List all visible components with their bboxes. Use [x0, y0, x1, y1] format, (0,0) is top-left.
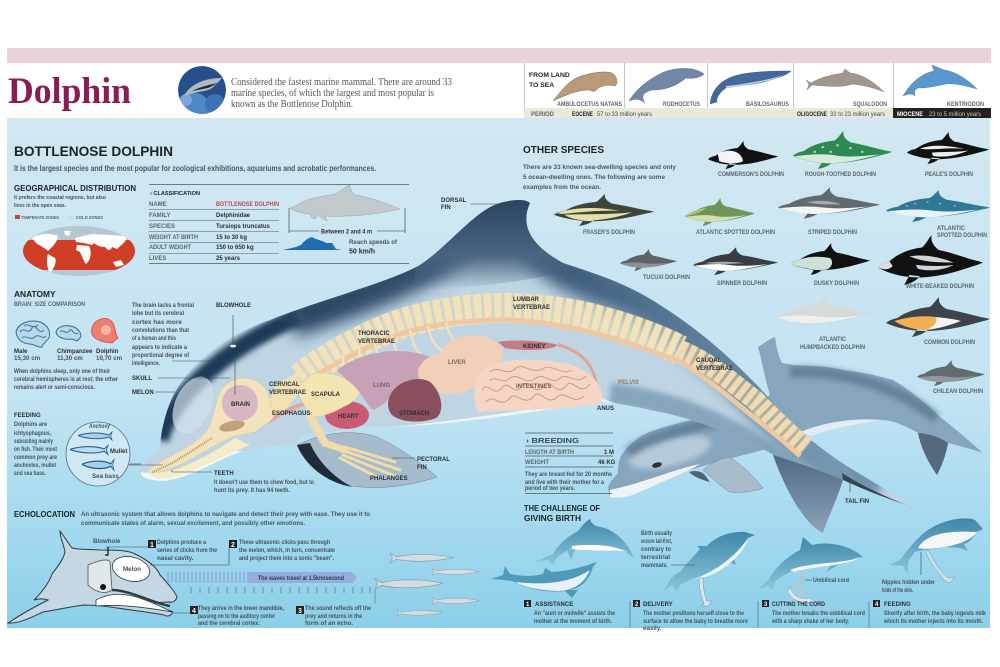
species labels: STRIPED DOLPHIN: [808, 230, 857, 236]
arrow: ultrasonic waves: [168, 572, 357, 584]
anatomy labels: HEART: [338, 414, 359, 420]
anatomy labels: PECTORAL: [417, 457, 450, 463]
timeline species names: BASILOSAURUS: [746, 102, 789, 108]
tucuxi dolphin: [620, 249, 677, 271]
second dolphin belly and jaw: [610, 464, 700, 498]
step 1 assistance: An "aunt or midwife" assists the: [534, 610, 615, 617]
breeding rows: LENGTH AT BIRTH: [525, 450, 574, 456]
feeding text: anchovies, mullet: [14, 462, 56, 469]
second dolphin back flipper: [689, 471, 710, 482]
timeline periods: 33 to 23 million years: [830, 112, 885, 118]
birth note: terrestrial: [641, 554, 670, 561]
sleep text: When dolphins sleep, only one of their: [14, 368, 110, 375]
panel: from land to sea timeline: [524, 63, 991, 118]
commerson's dolphin: [708, 141, 778, 169]
main dolphin: [130, 190, 930, 540]
cervical vertebrae: [270, 372, 302, 415]
timeline periods: [531, 112, 981, 118]
striped dolphin: [778, 187, 880, 219]
blowhole mark: [230, 344, 236, 348]
classification rows: ADULT WEIGHT: [149, 245, 191, 251]
panel: breeding: [525, 433, 616, 494]
anatomy labels: PELVIS: [618, 380, 639, 386]
echolocation heading: ECHOLOCATION: [14, 510, 75, 519]
step 4 feeding: which its mother injects into its mouth.: [883, 618, 983, 625]
teeth text: hunt its prey. It has 94 teeth.: [214, 487, 290, 494]
classification rows: Tursiops truncatus: [216, 224, 271, 230]
speed text: Reach speeds of: [349, 239, 398, 246]
step 3 echo: The sound reflects off the: [305, 605, 371, 612]
timeline species names: RODHOCETUS: [663, 102, 700, 108]
step 4 feeding: FEEDING: [884, 602, 911, 608]
species labels: WHITE-BEAKED DOLPHIN: [906, 284, 974, 290]
species labels: ROUGH-TOOTHED DOLPHIN: [805, 172, 876, 178]
classification rows: NAME: [149, 202, 167, 208]
anatomy labels: INTESTINES: [516, 384, 551, 390]
spine and vertebrae: [300, 308, 806, 456]
nipple callout: folds of the skin.: [882, 587, 913, 594]
brain text: proportional degree of: [132, 352, 190, 359]
fraser's dolphin: [554, 194, 654, 226]
step 3 cutting the cord: 3: [764, 602, 768, 608]
species labels: SPOTTED DOLPHIN: [937, 233, 987, 239]
timeline periods: 23 to 5 million years: [929, 112, 981, 118]
brain sizes: Chimpanzee: [57, 349, 93, 355]
brain sizes: Dolphin: [96, 349, 119, 355]
intro text: Considered the fastest marine mammal. There are around 33: [231, 77, 452, 88]
pectoral fin: [297, 433, 437, 488]
timeline periods: OLIGOCENE: [797, 112, 827, 118]
panel: the challenge of giving birth: [491, 504, 986, 632]
step 4 feeding: 4: [875, 602, 879, 608]
anatomy labels: FIN: [417, 465, 427, 471]
speed text: [349, 239, 398, 256]
feeding text: and sea bass.: [14, 470, 46, 477]
feeding heading: FEEDING: [14, 413, 41, 419]
anatomy labels: VERTEBRAE: [358, 339, 395, 345]
dusky dolphin: [791, 243, 870, 275]
anatomy labels: MELON: [132, 390, 154, 396]
timeline heading: FROM LAND: [529, 72, 570, 79]
teeth text: It doesn't use them to chew food, but to: [214, 479, 314, 486]
breeding text: They are breast-fed for 20 months: [525, 471, 612, 478]
teeth text: [214, 479, 314, 494]
breeding rows: 1 M: [604, 450, 614, 456]
feeding text: common prey are: [14, 454, 57, 461]
classification rows: 15 to 30 kg: [216, 235, 247, 241]
anatomy labels: [128, 198, 869, 505]
species labels: SPINNER DOLPHIN: [717, 281, 767, 287]
feeding text: subsisting mainly: [14, 438, 53, 445]
other species text: 5 ocean-dwelling ones. The following are some: [523, 174, 665, 181]
echolocation text: communicate states of alarm, sexual excitement, and possibly other emotions.: [81, 520, 305, 527]
icon: dolphin brain: [92, 318, 118, 343]
panel: other species: [523, 131, 990, 395]
nipple callout: Nipples hidden under: [882, 579, 935, 586]
flipper bones: [310, 416, 400, 476]
classification rows: BOTTLENOSE DOLPHIN: [216, 202, 279, 208]
anatomy labels: TEETH: [214, 471, 234, 477]
rough-toothed dolphin: [793, 131, 892, 169]
brain sizes: 11,30 cm: [57, 355, 83, 362]
birth note: mammals.: [641, 562, 668, 569]
ribs: [343, 322, 458, 385]
anatomy labels: DORSAL: [441, 198, 467, 204]
second dolphin light flank: [626, 428, 714, 476]
breeding text: [525, 471, 612, 492]
brain text: [132, 302, 194, 367]
map legend: COLD ZONES: [76, 215, 103, 220]
birth dolphin 3: [756, 537, 863, 590]
anatomy labels: VERTEBRAE: [513, 305, 550, 311]
intro text: [231, 77, 452, 110]
liver: [418, 335, 503, 394]
brain sizes: Male: [14, 349, 28, 355]
brain text: The brain lacks a frontal: [132, 302, 194, 309]
second dolphin back shade: [628, 372, 936, 452]
timeline periods: 57 to 33 million years: [597, 112, 652, 118]
panel: classification table: [149, 184, 409, 264]
species labels: HUMPBACKED DOLPHIN: [800, 345, 865, 351]
anatomy labels: LUNG: [373, 383, 390, 389]
breeding text: period of two years.: [525, 485, 575, 492]
step 4 feeding: [869, 600, 986, 628]
brain text: of a human and this: [132, 335, 176, 342]
anatomy labels: TAIL FIN: [845, 499, 869, 505]
pectoral dark edge: [297, 443, 352, 487]
second dolphin pectoral fin: [703, 457, 763, 492]
intro text: marine species, of which the largest and most popular is: [231, 88, 434, 99]
step 4 auditory: passing on to the auditory center: [198, 613, 275, 620]
brain text: appears to indicate a: [132, 344, 187, 351]
echolocation text: An ultrasonic system that allows dolphins to navigate and detect their prey with ease. They use it to: [81, 511, 370, 518]
breeding rows: [525, 450, 616, 466]
species labels: ATLANTIC SPOTTED DOLPHIN: [696, 230, 775, 236]
timeline periods: MIOCENE: [897, 112, 923, 118]
timeline heading: [529, 72, 570, 89]
step 4 auditory: They arrive in the lower mandible,: [198, 605, 284, 612]
step 3 cutting the cord: The mother breaks the umbilical cord: [772, 610, 865, 617]
birth heading: GIVING BIRTH: [524, 514, 581, 523]
timeline species names: KENTRIODON: [947, 102, 984, 108]
geographical text: [14, 195, 107, 209]
subtitle: It is the largest species and the most popular for zoological exhibitions, aquariums and acrobatic performances.: [14, 164, 376, 173]
lung: [337, 351, 430, 410]
icon: squalodon: [806, 69, 884, 92]
step 4 auditory: and the cerebral cortex.: [198, 620, 260, 627]
feeding text: on fish. Their most: [14, 446, 57, 453]
peale's dolphin: [907, 132, 989, 164]
timeline periods: PERIOD: [531, 112, 555, 118]
callout: prey fish circle: Anchovy: [88, 423, 110, 430]
panel: second dolphin background: [608, 337, 983, 498]
baby dolphin feeding: [926, 550, 955, 583]
panel: geographical distribution: [14, 183, 140, 280]
timeline heading: TO SEA: [529, 82, 554, 89]
species labels: PEALE'S DOLPHIN: [925, 172, 973, 178]
anatomy labels: LUMBAR: [513, 297, 540, 303]
brain sizes: 10,70 cm: [96, 355, 123, 362]
anatomy labels: ANUS: [597, 406, 614, 412]
anatomy labels: ESOPHAGUS: [272, 411, 310, 417]
species labels: ATLANTIC: [937, 226, 966, 232]
icon: human brain: [16, 321, 50, 347]
icon: rodhocetus: [629, 68, 704, 103]
anatomy labels: VERTEBRAE: [696, 366, 733, 372]
intro text: known as the Bottlenose Dolphin.: [231, 99, 353, 110]
geographical heading: GEOGRAPHICAL DISTRIBUTION: [14, 183, 136, 193]
anatomy heading: ANATOMY: [14, 289, 56, 299]
geographical text: It prefers the coastal regions, but also: [14, 195, 107, 201]
step 1 assistance: mother at the moment of birth.: [534, 618, 612, 625]
anatomy labels: BLOWHOLE: [216, 303, 251, 309]
echolocation text: [81, 511, 370, 527]
icon: ambulocetus: [553, 72, 617, 101]
step 2 delivery: [630, 600, 748, 632]
breeding rows: 46 KG: [598, 460, 616, 466]
anatomy labels: LIVER: [448, 360, 466, 366]
anatomy labels: BRAIN: [231, 402, 250, 408]
step 4 auditory: [190, 605, 284, 627]
spinner dolphin: [693, 247, 778, 275]
step 1 assistance: ASSISTANCE: [535, 602, 573, 608]
step 2 delivery: 2: [635, 602, 639, 608]
step 1 clicks: Dolphins produce a: [157, 539, 206, 546]
other species heading: OTHER SPECIES: [523, 144, 604, 156]
step 3 cutting the cord: CUTTING THE CORD: [772, 602, 826, 608]
chilean dolphin: [917, 360, 985, 386]
panel: echolocation: [8, 510, 479, 627]
geographical text: lives in the open seas.: [14, 203, 66, 209]
echolocation dolphin diagram: Blowhole: [93, 538, 121, 545]
esophagus: [268, 398, 325, 422]
heart: [325, 401, 369, 429]
birth note: [641, 530, 695, 569]
icon: size dolphin: [290, 185, 400, 221]
second dolphin white belly patch: [800, 419, 880, 436]
second dolphin fluke: [918, 433, 948, 475]
step 2 beam: [229, 539, 335, 562]
breeding rows: WEIGHT: [525, 460, 549, 466]
returning echo ticks: [191, 587, 370, 593]
anatomy labels: FIN: [441, 205, 451, 211]
classification rows: SPECIES: [149, 224, 175, 230]
step 3 cutting the cord: with a sharp shake of her body.: [771, 618, 849, 625]
anatomy labels: CERVICAL: [269, 382, 300, 388]
heading: bottlenose dolphin: BOTTLENOSE DOLPHIN: [14, 143, 173, 159]
other species text: examples from the ocean.: [523, 184, 601, 191]
anatomy labels: PHALANGES: [370, 476, 408, 482]
anatomy labels: SKULL: [132, 376, 152, 382]
step 2 beam: 2: [231, 542, 235, 549]
feeding text: Dolphins are: [14, 421, 47, 428]
atlantic humpbacked dolphin: [776, 296, 872, 328]
step 1 assistance: [524, 600, 615, 625]
species labels: TUCUXI DOLPHIN: [643, 275, 690, 281]
sleep text: [14, 368, 119, 391]
main body: [130, 190, 930, 540]
other species text: [523, 164, 676, 191]
brain text: lobe but its cerebral: [132, 310, 184, 317]
world map: [23, 226, 135, 276]
sleep text: remains alert or semi-conscious.: [14, 384, 95, 391]
step 3 echo: form of an echo.: [305, 620, 353, 627]
birth heading: [524, 504, 600, 523]
classification rows: 25 years: [216, 256, 241, 262]
timeline species names: [557, 102, 984, 108]
step 2 delivery: surface to allow the baby to breathe more: [643, 618, 748, 625]
icon: blue wave speed: [283, 237, 342, 250]
birth dolphin 4: [889, 518, 983, 575]
anatomy labels: KIDNEY: [523, 344, 546, 350]
classification rows: LIVES: [149, 256, 166, 262]
second dolphin eye: [652, 461, 662, 469]
fish school: [375, 553, 479, 616]
anatomy labels: CAUDAL: [696, 358, 722, 364]
pink header band: [7, 48, 991, 63]
birth dolphin 2: [663, 532, 755, 592]
brain text: cortex has more: [132, 319, 183, 326]
step 3 echo: prey and returns in the: [305, 613, 362, 620]
second dolphin body: [608, 337, 983, 498]
species labels: FRASER'S DOLPHIN: [583, 230, 635, 236]
dimension line: Between 2 and 4 m: [321, 230, 372, 236]
umbilical cord and baby: Umbilical cord: [813, 577, 849, 584]
species labels: COMMERSON'S DOLPHIN: [718, 172, 784, 178]
step 2 delivery: DELIVERY: [643, 602, 673, 608]
step 4 auditory: 4: [192, 608, 196, 615]
echolocation dolphin diagram: Melon: [123, 566, 141, 573]
classification rows: FAMILY: [149, 213, 170, 219]
feeding text: ichtyophagous,: [14, 430, 51, 437]
echolocation dolphin diagram: [8, 531, 229, 623]
callout: prey fish circle: [66, 422, 141, 486]
dimension line: [289, 208, 405, 236]
umbilical cord and baby: [788, 570, 849, 603]
icon: kentriodon: [903, 65, 977, 96]
white-beaked dolphin: [878, 235, 983, 285]
sleep text: cerebral hemispheres is at rest; the other: [14, 376, 119, 383]
brain text: intelligence.: [132, 360, 160, 367]
map legend: TEMPERATE ZONES: [21, 215, 59, 220]
timeline periods: EOCENE: [572, 112, 593, 118]
birth heading: THE CHALLENGE OF: [524, 504, 600, 513]
anatomy labels: THORACIC: [358, 331, 390, 337]
step 4 feeding: Shortly after birth, the baby ingests milk: [884, 610, 986, 617]
panel: ocean background: [7, 118, 990, 628]
step 2 beam: and project them into a sonic "beam".: [239, 555, 334, 562]
icon: intro photo of dolphin: [178, 66, 226, 114]
classification rows: Delphinidae: [216, 213, 251, 219]
timeline species names: AMBULOCETUS NATANS: [557, 102, 622, 108]
breeding heading: › BREEDING: [526, 436, 579, 445]
step 1 clicks: 1: [150, 542, 154, 549]
classification rows: WEIGHT AT BIRTH: [149, 235, 198, 241]
brain: [222, 385, 258, 421]
feeding text: [14, 421, 57, 477]
species labels: ATLANTIC: [819, 337, 847, 343]
kidney: [498, 341, 596, 382]
common dolphin: [886, 297, 990, 337]
title: Dolphin: [8, 71, 131, 112]
step 1 clicks: [148, 539, 217, 562]
panel: anatomy: [14, 289, 141, 486]
brain sizes: 15,30 cm: [14, 355, 41, 362]
step 2 delivery: The mother positions herself close to the: [643, 610, 744, 617]
classification rows: [149, 202, 279, 262]
species labels: CHILEAN DOLPHIN: [933, 389, 983, 395]
anatomy labels: STOMACH: [399, 411, 429, 417]
callout: prey fish circle: Mullet: [110, 449, 127, 455]
brain text: convolutions than that: [132, 327, 189, 334]
arrow: ultrasonic waves: The waves travel at 1.5km/second: [258, 575, 344, 582]
skull and beak bones: [147, 378, 275, 479]
birth note: Birth usually: [641, 530, 672, 537]
scapula: [297, 373, 360, 417]
step 1 clicks: series of clicks from the: [157, 547, 217, 554]
step 3 cutting the cord: [758, 600, 865, 628]
step 2 beam: the melon, which, in turn, concentrate: [239, 547, 335, 554]
brain sizes: [14, 349, 123, 362]
step 3 echo: 3: [298, 608, 302, 615]
classification heading: › CLASSIFICATION: [150, 191, 200, 197]
speed text: 50 km/h: [349, 248, 375, 256]
species labels: DUSKY DOLPHIN: [814, 281, 859, 287]
species labels: [583, 172, 987, 395]
anatomy labels: VERTEBRAE: [269, 390, 306, 396]
callout: prey fish circle: Sea bass: [92, 473, 119, 480]
icon: chimpanzee brain: [56, 326, 81, 341]
brain comparison subheading: BRAIN: SIZE COMPARISON: [14, 302, 85, 308]
other species text: There are 33 known sea-dwelling species and only: [523, 164, 676, 171]
birth note: occurs tail-first,: [641, 538, 672, 545]
stomach: [388, 379, 441, 422]
step 1 assistance: 1: [526, 602, 530, 608]
breeding text: and live with their mother for a: [525, 479, 604, 486]
nipple callout: [882, 552, 935, 594]
step 1 clicks: nasal cavity.: [157, 555, 194, 562]
step 2 delivery: easily.: [643, 625, 662, 632]
step 2 beam: These ultrasonic clicks pass through: [239, 539, 330, 546]
icon: basilosaurus: [710, 71, 791, 104]
step 3 echo: [296, 590, 375, 627]
birth dolphin 1 lower: [491, 562, 597, 598]
birth note: contrary to: [641, 546, 671, 553]
intestines: [474, 359, 602, 412]
atlantic spotted dolphin blue: [886, 190, 990, 222]
species labels: COMMON DOLPHIN: [924, 340, 975, 346]
classification rows: 150 to 650 kg: [216, 245, 254, 251]
anatomy labels: SCAPULA: [311, 392, 341, 398]
map legend: [15, 215, 103, 220]
atlantic spotted dolphin: [685, 198, 755, 226]
birth dolphin 1 upper: [535, 519, 634, 565]
baby dolphin delivery: [699, 578, 712, 606]
timeline species names: SQUALODON: [853, 102, 887, 108]
